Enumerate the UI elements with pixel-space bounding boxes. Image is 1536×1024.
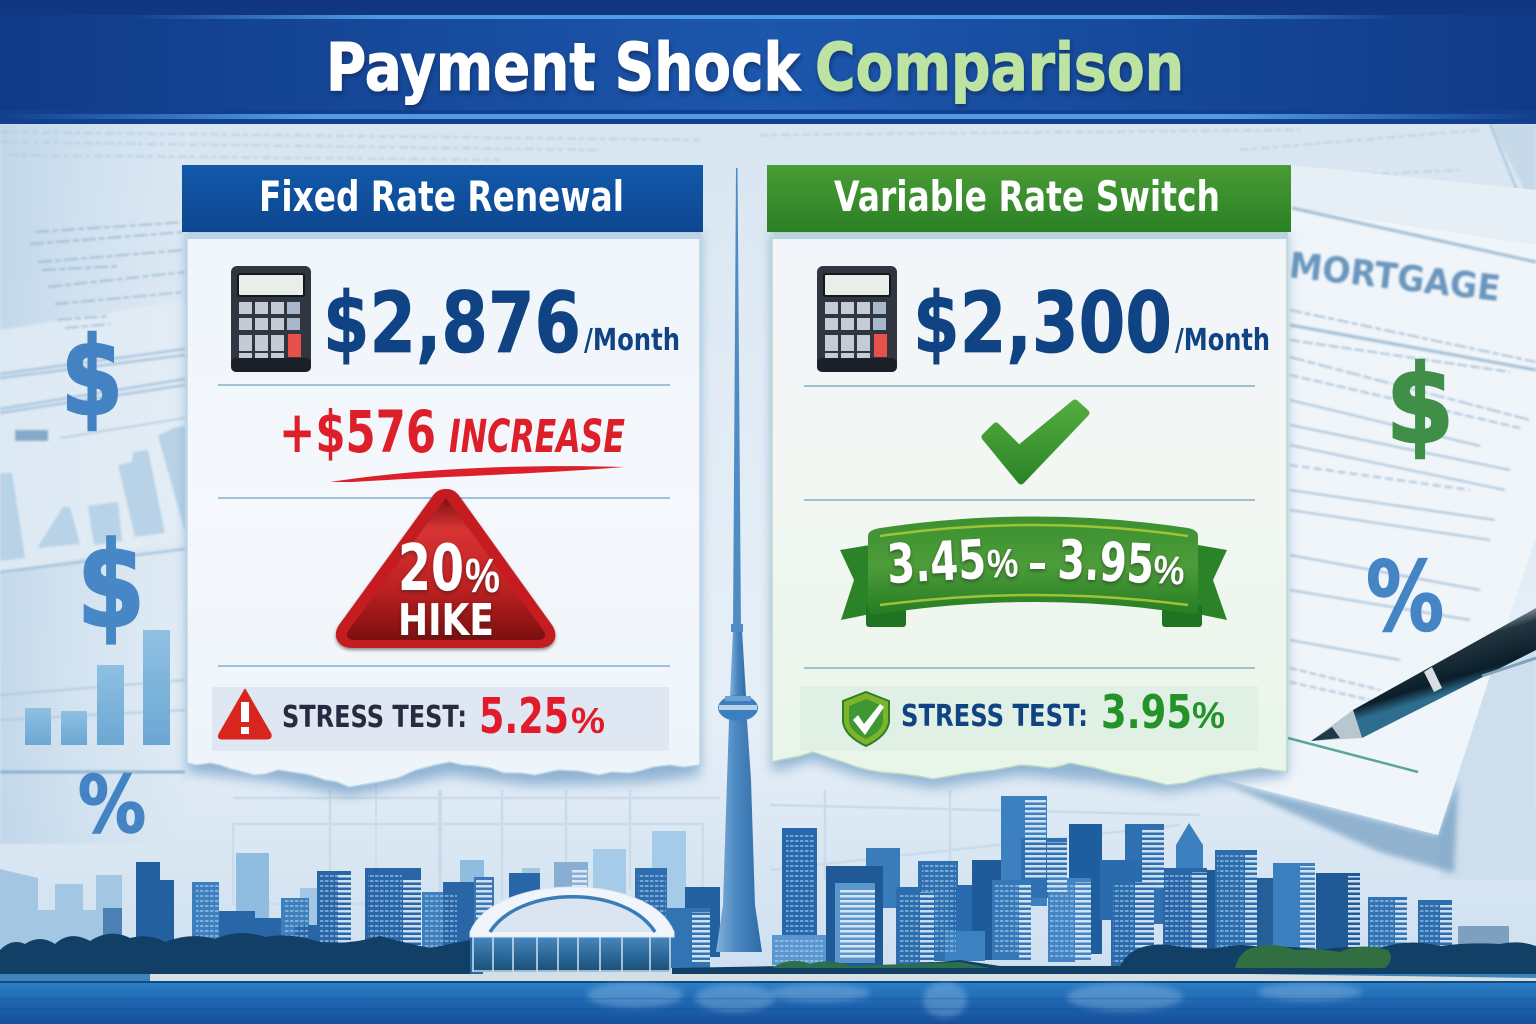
monthly payment: $2,876: [323, 274, 581, 372]
panel: variable rate switch: [767, 165, 1291, 792]
rate ribbon: 3.45: [885, 528, 988, 596]
monthly payment: $2,300: [913, 274, 1172, 372]
rate ribbon: %: [1152, 548, 1186, 594]
icon: shield check: [843, 692, 889, 746]
icon: pen: [1311, 608, 1536, 741]
panel: fixed rate renewal: [182, 165, 703, 796]
increase callout: INCREASE: [449, 410, 625, 463]
CN tower spire: [733, 168, 741, 630]
icon: warning triangle: [218, 689, 271, 739]
skyline: [0, 796, 1536, 975]
rate ribbon: [840, 516, 1227, 627]
rate ribbon: %: [986, 541, 1019, 587]
background: mortgage document: [1218, 165, 1536, 880]
title: Comparison: [815, 29, 1184, 106]
warning badge: 20% hike: 20: [398, 532, 464, 606]
background: city grid: [233, 780, 1200, 904]
background: top papers: [0, 124, 1536, 215]
CN tower: [716, 624, 762, 952]
icon: left percent sign: %: [78, 761, 146, 851]
title: [326, 29, 1184, 106]
monthly payment: /Month: [1175, 323, 1270, 358]
rate ribbon: 3.95: [1056, 528, 1155, 596]
card heading bar: Fixed Rate Renewal: [259, 172, 624, 221]
document word: mortgage: MORTGAGE: [1287, 245, 1502, 310]
icon: calculator: [231, 266, 311, 372]
icon: left bar chart: [25, 630, 170, 745]
stress test row: STRESS TEST:: [901, 699, 1088, 734]
icon: check mark: [985, 403, 1086, 481]
warning badge: 20% hike: %: [465, 550, 500, 603]
icon: green dollar sign: $: [1386, 343, 1454, 468]
warning badge: 20% hike: [336, 489, 555, 648]
light distant buildings: [0, 831, 1509, 975]
dark buildings: [103, 796, 1452, 975]
icon: blue percent sign: %: [1366, 541, 1444, 653]
increase callout: +$576: [279, 398, 436, 466]
increase callout: [279, 398, 625, 482]
stress test row: 3.95: [1101, 685, 1192, 739]
header band: [0, 0, 1536, 124]
card shadow: [772, 232, 1287, 792]
stress test row: %: [1192, 695, 1225, 736]
card shadow: [187, 232, 700, 796]
background: left financial documents: [0, 124, 190, 844]
stress test row: STRESS TEST:: [282, 700, 467, 735]
tree line: [0, 933, 470, 974]
green trees: [1235, 945, 1391, 968]
card paper: [772, 232, 1287, 785]
icon: calculator: [817, 266, 897, 372]
card heading bar: Variable Rate Switch: [834, 172, 1220, 221]
stress test row: [212, 687, 669, 751]
stress test row: [800, 685, 1258, 751]
card heading bar: [767, 165, 1291, 232]
stress test row: 5.25: [479, 688, 569, 745]
title: Payment Shock: [326, 29, 802, 106]
waterfront and water: [0, 974, 1536, 1024]
card paper: [187, 232, 700, 787]
monthly payment: /Month: [584, 323, 680, 358]
icon: left dollar sign lower: $: [77, 516, 145, 654]
card heading bar: [182, 165, 703, 232]
warning badge: 20% hike: HIKE: [398, 595, 494, 646]
window facades: [338, 800, 1452, 967]
icon: left dollar sign upper: $: [61, 315, 123, 440]
stress test row: %: [571, 700, 605, 741]
stadium dome: [470, 887, 674, 972]
